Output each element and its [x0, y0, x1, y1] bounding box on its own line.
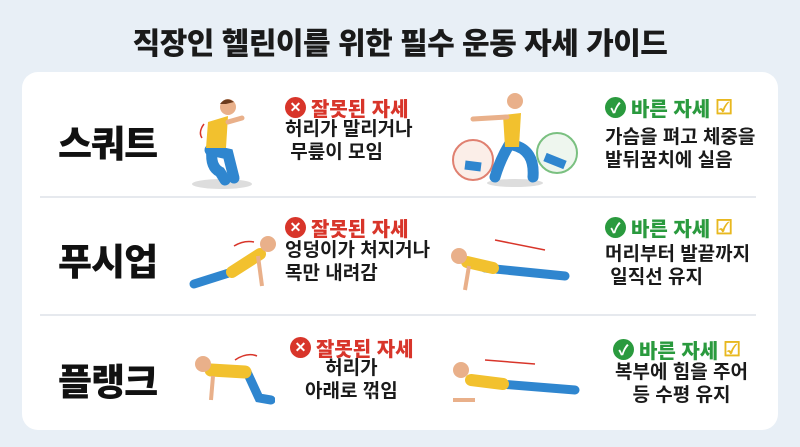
- good header plank: ✓: [618, 342, 629, 358]
- good header squat: [605, 97, 733, 121]
- bad text pushup: 목만 내려감: [285, 263, 378, 284]
- figure: squat wrong: [192, 99, 252, 189]
- good text plank: 복부에 힘을 주어: [615, 362, 748, 383]
- label: plank: 플랭크: [58, 362, 157, 403]
- good header squat: 바른 자세: [631, 99, 710, 121]
- bad header squat: ✕: [290, 99, 301, 115]
- figure: pushup right: [451, 239, 570, 290]
- good text squat: 가슴을 펴고 체중을: [605, 127, 755, 148]
- bad text pushup: 엉덩이가 처지거나: [285, 240, 430, 261]
- good header pushup: [605, 217, 733, 241]
- bad text squat: 무릎이 모임: [290, 142, 383, 163]
- figure: plank right: [453, 359, 580, 402]
- good header pushup: ✓: [610, 220, 621, 236]
- title: 직장인 헬린이를 위한 필수 운동 자세 가이드: [133, 28, 667, 61]
- figure: plank wrong: [195, 354, 275, 404]
- good header plank: ☑: [723, 339, 741, 361]
- figure: pushup wrong: [190, 236, 276, 288]
- bad text squat: 허리가 말리거나: [285, 119, 413, 140]
- good header plank: [613, 339, 741, 363]
- good header squat: ✓: [610, 100, 621, 116]
- good header squat: ☑: [715, 97, 733, 119]
- good text pushup: 일직선 유지: [610, 267, 703, 288]
- bad header pushup: 잘못된 자세: [311, 219, 409, 241]
- bad text plank: 아래로 꺾임: [305, 381, 398, 402]
- good header pushup: ☑: [715, 217, 733, 239]
- bad header squat: 잘못된 자세: [311, 99, 409, 121]
- good header plank: 바른 자세: [639, 341, 718, 363]
- good text pushup: [605, 244, 750, 288]
- bad text squat: [285, 119, 413, 163]
- bad header plank: ✕: [295, 339, 306, 355]
- card: [22, 72, 778, 430]
- good header pushup: 바른 자세: [631, 219, 710, 241]
- label: squat: 스쿼트: [58, 124, 157, 165]
- label: pushup: 푸시업: [58, 242, 157, 283]
- good text plank: 등 수평 유지: [632, 385, 730, 406]
- good text squat: 발뒤꿈치에 실음: [605, 150, 733, 171]
- bad header plank: 잘못된 자세: [316, 339, 414, 361]
- bad text plank: [305, 358, 398, 402]
- good text plank: [615, 362, 748, 406]
- good text pushup: 머리부터 발끝까지: [605, 244, 750, 265]
- bad header pushup: ✕: [290, 219, 301, 235]
- bad text plank: 허리가: [325, 358, 378, 379]
- figure: squat right: [452, 93, 578, 187]
- good text squat: [605, 127, 755, 171]
- bad text pushup: [285, 240, 430, 284]
